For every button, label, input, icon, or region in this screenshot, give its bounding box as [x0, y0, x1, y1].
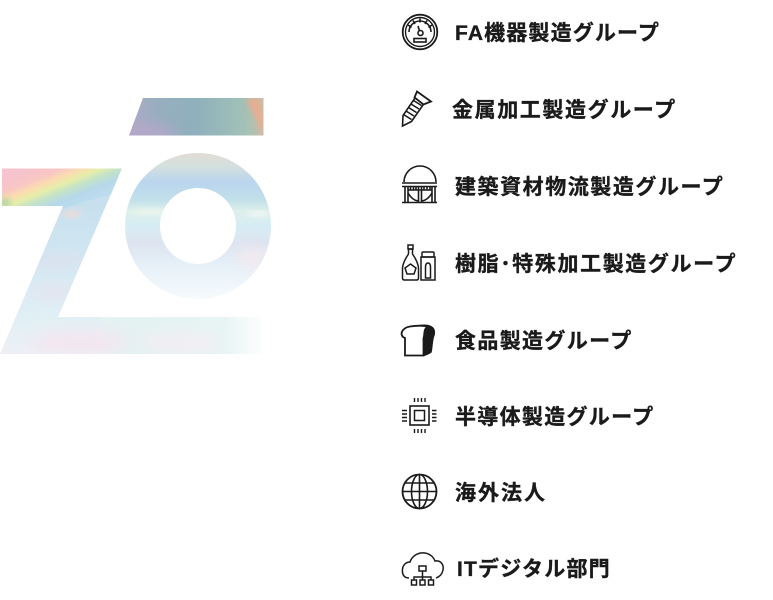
- label: building materials: 建築資材物流製造グループ: [455, 176, 724, 199]
- label: IT digital: ITデジタル部門: [457, 558, 611, 581]
- label: FA: FA機器製造グループ: [455, 22, 660, 45]
- label: resin: 樹脂･特殊加工製造グループ: [455, 253, 737, 276]
- label: overseas: 海外法人: [455, 482, 547, 505]
- logo: holographic ZO mark: [0, 98, 271, 354]
- label: food: 食品製造グループ: [455, 330, 633, 353]
- label: metal: 金属加工製造グループ: [452, 99, 677, 122]
- label: semiconductor: 半導体製造グループ: [455, 406, 654, 429]
